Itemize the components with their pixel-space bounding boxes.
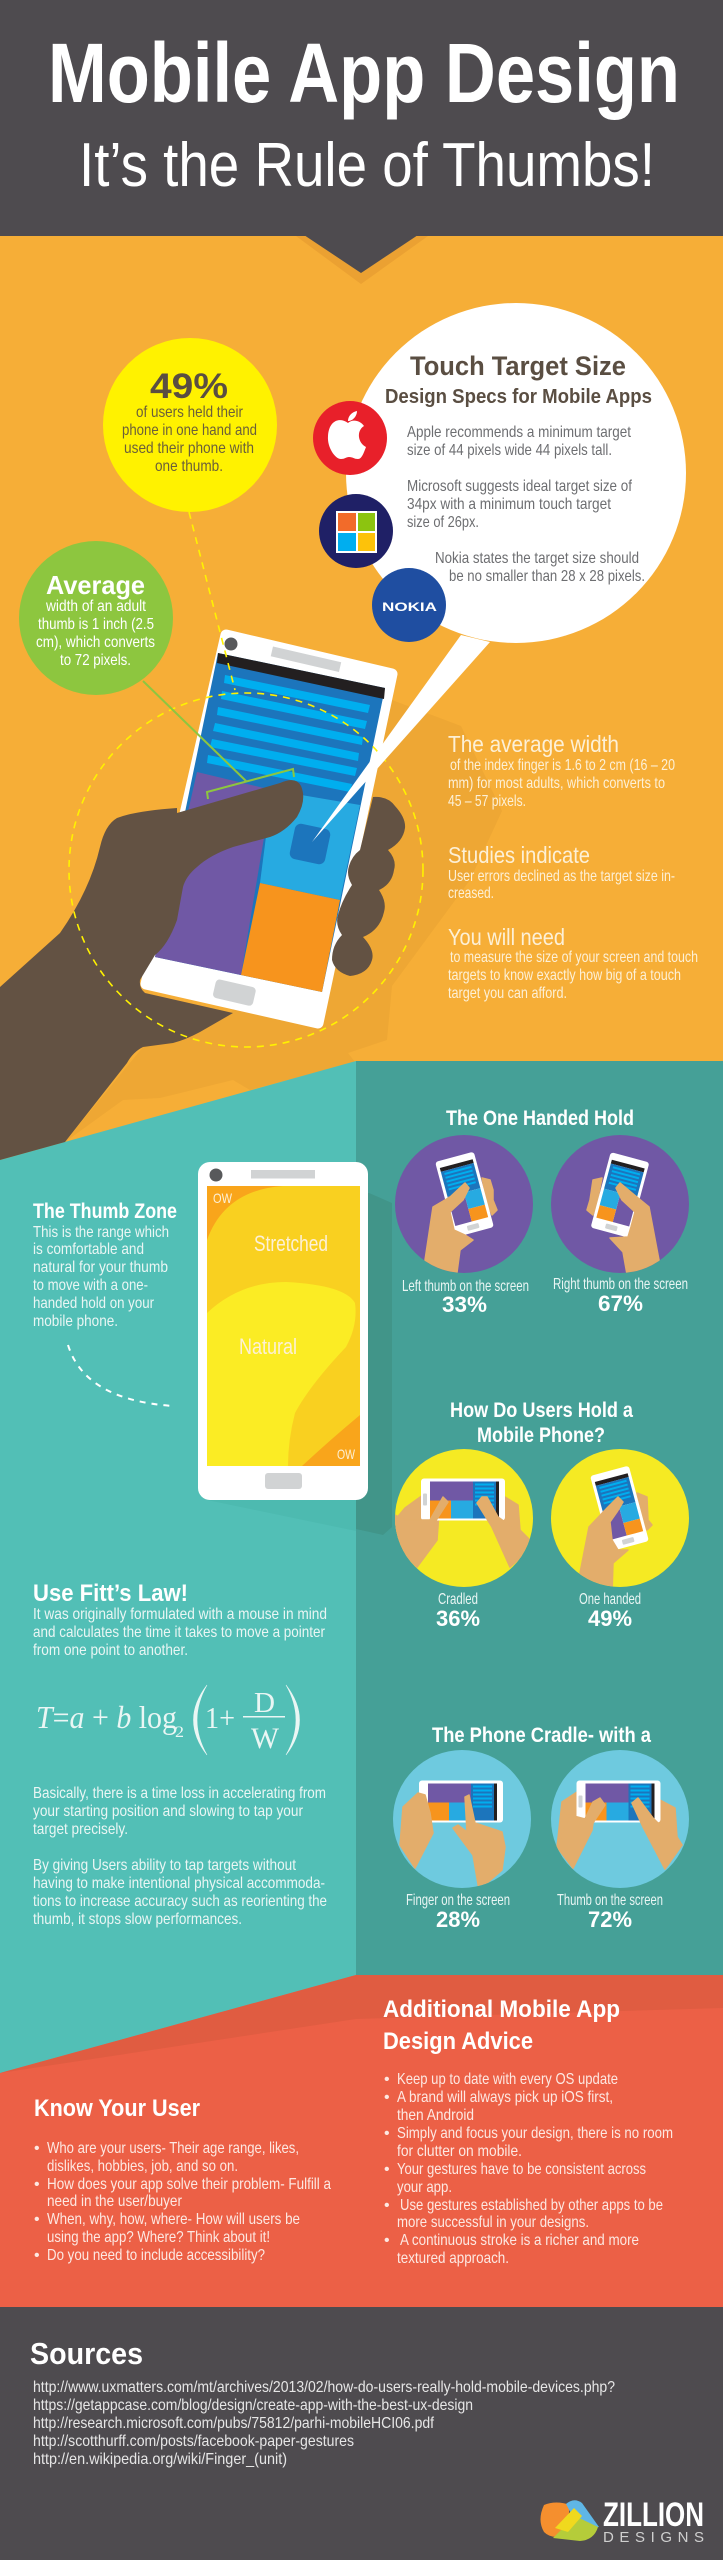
icon: nokia — [372, 568, 446, 642]
panel: additional mobile app design advice: A brand will always pick up iOS first, — [397, 2089, 613, 2106]
panel: footer background — [0, 2307, 723, 2560]
callout: 49 percent stat: one thumb. — [155, 458, 223, 475]
text block: average width of index finger — [448, 731, 675, 810]
bubble body text: Apple recommends a minimum target — [407, 424, 631, 441]
section: the phone cradle: The Phone Cradle- with a — [432, 1724, 651, 1747]
text block: the thumb zone: handed hold on your — [33, 1295, 155, 1312]
callout: 49 percent stat: phone in one hand and — [122, 422, 257, 439]
text block: average width of index finger: The average width — [448, 731, 619, 757]
text block: the thumb zone: is comfortable and — [33, 1241, 144, 1258]
panel: know your user: Who are your users- Their age range, likes, — [47, 2140, 299, 2157]
label: finger: Finger on the screen — [406, 1892, 510, 1909]
panel: know your user: using the app? Where? Think about it! — [47, 2229, 270, 2246]
formula: Fitt's law — [36, 1685, 300, 1755]
text block: the thumb zone: The Thumb Zone — [33, 1200, 177, 1223]
label: one handed — [579, 1591, 641, 1631]
icon: cradled hold — [395, 1449, 535, 1587]
text block: use Fitt's law: from one point to another. — [33, 1642, 188, 1659]
panel: additional mobile app design advice: • — [384, 2161, 390, 2178]
callout: 49 percent stat: used their phone with — [124, 440, 254, 457]
icon: apple — [313, 401, 387, 475]
panel: know your user: • — [34, 2140, 40, 2157]
phone body — [146, 635, 392, 1023]
panel: additional mobile app design advice: Additional Mobile App — [383, 1996, 620, 2023]
formula: Fitt's law: D — [254, 1687, 275, 1719]
text block: source links: http://scotthurff.com/posts/facebook-paper-gestures — [33, 2433, 354, 2450]
bubble body text: 34px with a minimum touch target — [407, 496, 611, 513]
text block: time loss explanation: target precisely. — [33, 1821, 128, 1838]
panel: additional mobile app design advice: Use gestures established by other apps to be — [400, 2197, 663, 2214]
text block: average width of index finger: 45 – 57 pixels. — [448, 793, 526, 810]
label: one handed: One handed — [579, 1591, 641, 1608]
panel: additional mobile app design advice: • — [384, 2125, 390, 2142]
label: left thumb: 33% — [442, 1292, 487, 1317]
panel: know your user: • — [34, 2211, 40, 2228]
panel: know your user: • — [34, 2247, 40, 2264]
panel: additional mobile app design advice: Simply and focus your design, there is no room — [397, 2125, 673, 2142]
panel: additional mobile app design advice: • — [384, 2197, 390, 2214]
zone labels — [213, 1190, 356, 1462]
label: cradled — [436, 1591, 480, 1631]
text block: average width of index finger: mm) for most adults, which converts to — [448, 775, 665, 792]
bubble heading: Design Specs for Mobile Apps — [385, 386, 652, 408]
panel: additional mobile app design advice: more successful in your designs. — [397, 2214, 589, 2231]
hand fingers — [332, 797, 405, 976]
icon: left thumb hold — [395, 1135, 533, 1280]
panel: know your user: Do you need to include accessibility? — [47, 2247, 265, 2264]
formula: Fitt's law: T=a + b log — [36, 1699, 177, 1735]
text block: you will need — [448, 924, 698, 1002]
panel: additional mobile app design advice: Keep up to date with every OS update — [397, 2071, 618, 2088]
text block: the thumb zone: natural for your thumb — [33, 1259, 168, 1276]
label: one handed: 49% — [588, 1606, 632, 1631]
text block: source links: http://www.uxmatters.com/mt/archives/2013/02/how-do-users-really-hold-mobile-devices.php? — [33, 2379, 615, 2396]
logo: Zillion Designs: DESIGNS — [603, 2529, 704, 2546]
label: cradled: Cradled — [438, 1591, 478, 1608]
panel: know your user: dislikes, hobbies, job, and so on. — [47, 2158, 238, 2175]
panel: know your user — [34, 2095, 331, 2264]
label: right thumb — [553, 1276, 688, 1316]
text block: use Fitt's law: It was originally formulated with a mouse in mind — [33, 1606, 327, 1623]
label: thumb: Thumb on the screen — [557, 1892, 663, 1909]
panel: know your user: Know Your User — [34, 2095, 200, 2122]
icon: thumb on the screen — [551, 1750, 689, 1888]
panel: red section background — [0, 1975, 723, 2308]
text block: source links: https://getappcase.com/blog/design/create-app-with-the-best-ux-design — [33, 2397, 473, 2414]
panel: know your user: When, why, how, where- How will users be — [47, 2211, 300, 2228]
text block: source links: http://research.microsoft.com/pubs/75812/parhi-mobileHCI06.pdf — [33, 2415, 434, 2432]
speech bubble: touch target size — [312, 303, 686, 842]
text block: the thumb zone: to move with a one- — [33, 1277, 148, 1294]
panel: orange background — [0, 0, 723, 1170]
panel: additional mobile app design advice: for clutter on mobile. — [397, 2143, 522, 2160]
dashed connector from 49 percent — [189, 512, 235, 690]
panel: additional mobile app design advice: Design Advice — [383, 2028, 533, 2055]
panel: additional mobile app design advice: textured approach. — [397, 2250, 509, 2267]
formula: Fitt's law: 1+ — [205, 1700, 235, 1735]
panel: teal sections — [0, 1061, 723, 2080]
text block: studies indicate — [448, 842, 675, 902]
label: finger — [406, 1892, 510, 1932]
formula: Fitt's law: W — [251, 1722, 280, 1755]
dashed guide circle — [69, 693, 423, 1047]
section: how do users hold a mobile phone: How Do Users Hold a — [450, 1399, 633, 1422]
bubble body text — [407, 424, 645, 585]
callout: average thumb width: to 72 pixels. — [60, 652, 131, 669]
illustration: hand holding phone — [0, 635, 405, 1160]
callout: 49 percent stat: of users held their — [136, 404, 244, 421]
hand palm and thumb — [0, 780, 303, 1160]
bubble body text: be no smaller than 28 x 28 pixels. — [449, 568, 645, 585]
text block: you will need: target you can afford. — [448, 985, 567, 1002]
panel: additional mobile app design advice: A continuous stroke is a richer and more — [400, 2232, 639, 2249]
callout: average thumb width: thumb is 1 inch (2.5 — [38, 616, 154, 633]
zone labels: OW — [337, 1446, 356, 1462]
label: cradled: 36% — [436, 1606, 480, 1631]
panel: additional mobile app design advice: • — [384, 2071, 390, 2088]
text block: time loss explanation: your starting position and slowing to tap your — [33, 1803, 304, 1820]
panel: know your user: • — [34, 2176, 40, 2193]
panel: additional mobile app design advice: your app. — [397, 2179, 452, 2196]
icon: microsoft — [319, 494, 393, 568]
text block: the thumb zone: mobile phone. — [33, 1313, 118, 1330]
green connector and bracket — [143, 681, 294, 799]
bubble body text: Microsoft suggests ideal target size of — [407, 478, 632, 495]
label: right thumb: 67% — [598, 1291, 643, 1316]
bubble heading — [385, 351, 652, 408]
text block: the thumb zone: This is the range which — [33, 1224, 169, 1241]
text block: time loss explanation — [33, 1785, 327, 1928]
header banner with arrow — [0, 0, 723, 284]
heading: sources: Sources — [30, 2336, 143, 2371]
panel: additional mobile app design advice — [383, 1996, 673, 2267]
text block: time loss explanation: having to make intentional physical accommoda- — [33, 1875, 325, 1892]
icon: right thumb hold — [551, 1135, 689, 1280]
text block: studies indicate: Studies indicate — [448, 842, 590, 868]
section: how do users hold a mobile phone — [395, 1399, 689, 1631]
bubble body text: size of 26px. — [407, 514, 479, 531]
logo: Zillion Designs — [540, 2496, 704, 2546]
label: thumb — [557, 1892, 663, 1932]
label: left thumb — [402, 1278, 529, 1317]
callout: 49 percent stat — [103, 338, 277, 512]
panel: additional mobile app design advice: • — [384, 2232, 390, 2249]
section: the one handed hold — [395, 1107, 689, 1317]
text block: source links — [33, 2379, 615, 2468]
panel: additional mobile app design advice: • — [384, 2089, 390, 2106]
callout: average thumb width: width of an adult — [45, 598, 146, 615]
section: the phone cradle — [393, 1724, 689, 1932]
text block: use Fitt's law — [33, 1580, 327, 1659]
callout: average thumb width: Average — [46, 570, 145, 600]
bubble body text: Nokia states the target size should — [435, 550, 639, 567]
text block: source links: http://en.wikipedia.org/wiki/Finger_(unit) — [33, 2451, 287, 2468]
panel: additional mobile app design advice: Your gestures have to be consistent across — [397, 2161, 646, 2178]
section: the one handed hold: The One Handed Hold — [446, 1107, 634, 1130]
panel: additional mobile app design advice: then Android — [397, 2107, 474, 2124]
zone labels: Stretched — [254, 1231, 328, 1256]
thumb zone phone — [198, 1162, 368, 1500]
callout: average thumb width: cm), which converts — [36, 634, 155, 651]
bubble heading: Touch Target Size — [410, 351, 626, 381]
subtitle: It’s the Rule of Thumbs! — [79, 131, 655, 200]
icon: one handed hold — [551, 1449, 689, 1595]
label: finger: 28% — [436, 1907, 480, 1932]
dashed arc pointing to phone — [68, 1345, 173, 1406]
label: left thumb: Left thumb on the screen — [402, 1278, 529, 1295]
text block: time loss explanation: Basically, there is a time loss in accelerating from — [33, 1785, 326, 1802]
zone labels: OW — [213, 1190, 233, 1206]
text block: time loss explanation: tions to increase accuracy such as reorienting the — [33, 1893, 327, 1910]
text block: time loss explanation: thumb, it stops slow performances. — [33, 1911, 242, 1928]
bubble body text: size of 44 pixels wide 44 pixels tall. — [407, 442, 612, 459]
panel: know your user: need in the user/buyer — [47, 2193, 183, 2210]
text block: use Fitt's law: Use Fitt’s Law! — [33, 1580, 188, 1607]
text block: use Fitt's law: and calculates the time it takes to move a pointer — [33, 1624, 326, 1641]
text block: studies indicate: creased. — [448, 885, 494, 902]
text block: the thumb zone — [33, 1200, 177, 1330]
text block: you will need: You will need — [448, 924, 565, 950]
panel: know your user: How does your app solve their problem- Fulfill a — [47, 2176, 331, 2193]
label: thumb: 72% — [588, 1907, 632, 1932]
section: how do users hold a mobile phone: Mobile Phone? — [477, 1424, 605, 1447]
icon: finger on the screen — [393, 1750, 531, 1890]
icon: nokia: NOKIA — [382, 600, 437, 614]
text block: time loss explanation: By giving Users ability to tap targets without — [33, 1857, 296, 1874]
formula: Fitt's law: 2 — [175, 1724, 184, 1741]
callout: 49 percent stat: 49% — [150, 367, 228, 406]
callout: average thumb width — [19, 541, 173, 695]
zone labels: Natural — [239, 1334, 297, 1359]
